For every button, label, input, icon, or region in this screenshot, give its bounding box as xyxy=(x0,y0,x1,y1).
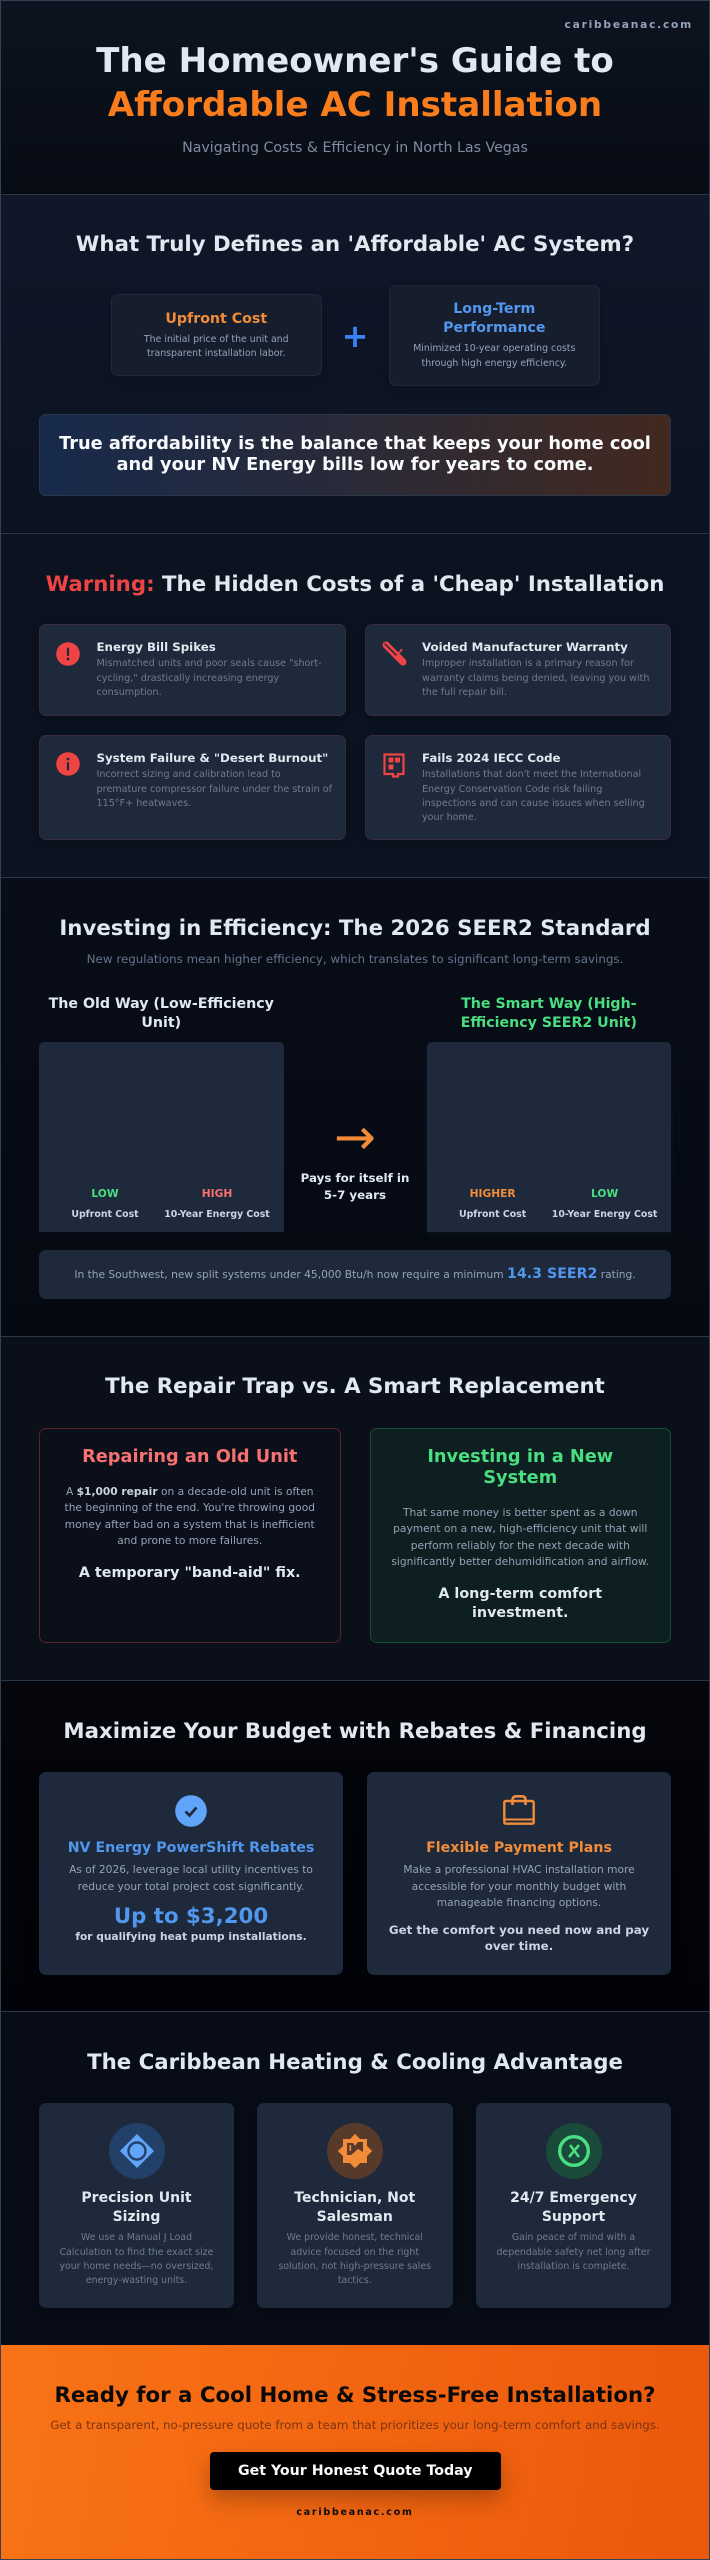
column title: smart way xyxy=(461,996,637,1031)
heading: Warning: The Hidden Costs of a 'Cheap' Installation xyxy=(46,572,664,597)
rebate amount: Up to $3,200 xyxy=(114,1904,268,1929)
card text: accessible for your monthly budget with xyxy=(412,1880,626,1893)
card conclusion: A long-term comfort xyxy=(438,1586,602,1602)
column title: old way: Unit) xyxy=(141,1015,181,1031)
icon: wrench xyxy=(382,642,406,666)
label: low upfront: LOW xyxy=(91,1187,119,1200)
card: long-term performance xyxy=(389,285,600,386)
column title: smart way: The Smart Way (High- xyxy=(461,996,637,1012)
card title xyxy=(294,2190,415,2225)
card text: through high energy efficiency. xyxy=(422,358,567,369)
card title: Precision Unit xyxy=(81,2190,192,2206)
card: precision sizing xyxy=(39,2103,234,2308)
section: repair vs replacement xyxy=(0,1337,710,1681)
card: payment plans xyxy=(367,1772,671,1975)
rebate note: for qualifying heat pump installations. xyxy=(75,1930,307,1943)
card text: tactics. xyxy=(338,2275,372,2286)
card text xyxy=(278,2232,431,2286)
card text: advice focused on the right xyxy=(290,2247,419,2258)
section: company advantage xyxy=(0,2012,710,2345)
card text xyxy=(403,1863,635,1909)
card: repairing xyxy=(39,1428,340,1643)
heading: Investing in Efficiency: The 2026 SEER2 Standard xyxy=(59,916,651,941)
card: emergency support xyxy=(476,2103,671,2308)
card text: Minimized 10-year operating costs xyxy=(413,343,575,354)
SEER2 note xyxy=(39,1250,671,1299)
card title: Energy Bill Spikes xyxy=(96,640,216,654)
plus sign: + xyxy=(342,317,368,355)
icon: info xyxy=(56,752,80,776)
axis: upfront cost: Upfront Cost xyxy=(71,1209,139,1220)
card text xyxy=(69,1863,313,1893)
card text: A $1,000 repair on a decade-old unit is often xyxy=(66,1485,314,1498)
title xyxy=(96,41,614,125)
card text: Incorrect sizing and calibration lead to xyxy=(96,769,281,780)
card text: premature compressor failure under the strain of xyxy=(96,784,332,795)
card text xyxy=(64,1485,315,1547)
card heading: Repairing an Old Unit xyxy=(82,1447,297,1467)
card text: significantly better dehumidification and airflow. xyxy=(391,1555,649,1568)
card text: transparent installation labor. xyxy=(147,348,286,359)
card conclusion xyxy=(438,1586,602,1621)
card text: We provide honest, technical xyxy=(287,2232,423,2243)
card text xyxy=(391,1506,649,1568)
card: fails code xyxy=(365,735,671,840)
payback text: 5-7 years xyxy=(324,1188,386,1202)
card text: dependable safety net long after xyxy=(496,2247,651,2258)
callout text: True affordability is the balance that keeps your home cool xyxy=(59,434,651,454)
card conclusion: over time. xyxy=(485,1939,553,1953)
card text: That same money is better spent as a down xyxy=(403,1506,638,1519)
card text: and prone to more failures. xyxy=(117,1534,262,1547)
card text: Gain peace of mind with a xyxy=(512,2232,635,2243)
label: higher upfront: HIGHER xyxy=(470,1187,516,1200)
heading: What Truly Defines an 'Affordable' AC System? xyxy=(76,232,634,257)
card title: System Failure & "Desert Burnout" xyxy=(96,751,328,765)
card text: Calculation to find the exact size xyxy=(60,2247,213,2258)
card text: warranty claims being denied, leaving you with xyxy=(422,673,650,684)
card text: your home. xyxy=(422,812,477,823)
callout text xyxy=(59,434,651,475)
website label: caribbeanac.com xyxy=(296,2507,414,2518)
card text: We use a Manual J Load xyxy=(81,2232,192,2243)
card: investing xyxy=(370,1428,671,1643)
section: efficiency standard xyxy=(0,878,710,1337)
CTA button xyxy=(210,2452,500,2490)
card heading: Investing in a New xyxy=(427,1447,613,1467)
card text: payment on a new, high-efficiency unit that will xyxy=(393,1522,647,1535)
subtitle: Navigating Costs & Efficiency in North Las Vegas xyxy=(182,140,528,156)
card text: Energy Conservation Code risk failing xyxy=(422,784,602,795)
payback text: Pays for itself in xyxy=(301,1171,409,1185)
section: what defines affordable xyxy=(0,195,710,534)
label: low energy: LOW xyxy=(591,1187,618,1200)
card: system failure xyxy=(39,735,346,840)
card: voided warranty xyxy=(365,624,671,716)
card heading: NV Energy PowerShift Rebates xyxy=(68,1840,314,1856)
card text: installation is complete. xyxy=(518,2261,629,2272)
card text: your home needs—no oversized, xyxy=(60,2261,213,2272)
website label: caribbeanac.com xyxy=(565,18,693,30)
payback text xyxy=(301,1171,409,1202)
axis: energy cost: 10-Year Energy Cost xyxy=(164,1209,270,1220)
card title: Voided Manufacturer Warranty xyxy=(422,640,628,654)
title: The Homeowner's Guide to xyxy=(96,41,614,81)
chart panel: smart way xyxy=(427,1042,671,1232)
column title: old way xyxy=(48,996,274,1031)
card title: Fails 2024 IECC Code xyxy=(422,751,561,765)
axis: energy cost: 10-Year Energy Cost xyxy=(552,1209,657,1220)
CTA heading: Ready for a Cool Home & Stress-Free Installation? xyxy=(54,2382,656,2408)
column title: smart way: Efficiency SEER2 Unit) xyxy=(461,1015,637,1031)
card heading: Performance xyxy=(443,320,546,336)
card heading: Flexible Payment Plans xyxy=(426,1840,612,1856)
card: rebates xyxy=(39,1772,343,1975)
card text: The initial price of the unit and xyxy=(144,334,289,345)
icon: technician star xyxy=(327,2123,383,2179)
card title: Technician, Not xyxy=(294,2190,415,2206)
heading: Maximize Your Budget with Rebates & Financing xyxy=(63,1719,647,1744)
card text: money after bad on a system that is inefficient xyxy=(65,1518,315,1531)
card text xyxy=(96,769,332,809)
card text: inspections and can cause issues when selling xyxy=(422,798,645,809)
card text xyxy=(422,769,645,823)
card text xyxy=(96,658,322,698)
card heading: Long-Term xyxy=(453,301,535,317)
card conclusion xyxy=(389,1923,649,1953)
CTA text: Get a transparent, no-pressure quote from a team that prioritizes your long-term comfort and savings. xyxy=(50,2418,660,2432)
card text: solution, not high-pressure sales xyxy=(278,2261,431,2272)
section: rebates and financing xyxy=(0,1681,710,2012)
section: hidden costs warning xyxy=(0,534,710,878)
card text: Mismatched units and poor seals cause "short- xyxy=(96,658,322,669)
card conclusion: Get the comfort you need now and pay xyxy=(389,1923,649,1937)
axis: upfront cost: Upfront Cost xyxy=(459,1209,526,1220)
card: upfront cost xyxy=(111,294,322,376)
card conclusion: A temporary "band-aid" fix. xyxy=(79,1565,301,1581)
arrow: → xyxy=(334,1108,376,1166)
card text: Installations that don't meet the International xyxy=(422,769,641,780)
card text xyxy=(60,2232,213,2286)
card conclusion: investment. xyxy=(472,1605,568,1621)
card heading xyxy=(443,301,546,336)
card title: Salesman xyxy=(317,2209,393,2225)
icon: check badge xyxy=(175,1795,207,1827)
icon: tools ring xyxy=(546,2123,602,2179)
card text: consumption. xyxy=(96,687,162,698)
card heading xyxy=(427,1447,613,1488)
card text: energy-wasting units. xyxy=(86,2275,187,2286)
card: energy bill spikes xyxy=(39,624,346,716)
card title: Sizing xyxy=(113,2209,160,2225)
card text xyxy=(144,334,289,359)
card text xyxy=(413,343,575,369)
card text: perform reliably for the next decade with xyxy=(411,1539,630,1552)
chart panel: old way xyxy=(39,1042,284,1232)
card text xyxy=(422,658,650,698)
hero header xyxy=(0,0,710,195)
note text: In the Southwest, new split systems under 45,000 Btu/h now require a minimum 14.3 SEER2 rating. xyxy=(74,1266,636,1282)
card text: As of 2026, leverage local utility incentives to xyxy=(69,1863,313,1876)
card text: Improper installation is a primary reason for xyxy=(422,658,634,669)
icon: building xyxy=(383,753,405,778)
card text: cycling," drastically increasing energy xyxy=(96,673,279,684)
card: technician xyxy=(257,2103,452,2308)
icon: briefcase xyxy=(503,1795,535,1825)
payback arrow group xyxy=(301,1108,409,1202)
card title xyxy=(81,2190,192,2225)
card title xyxy=(510,2190,637,2225)
CTA button: Get Your Honest Quote Today xyxy=(238,2463,473,2479)
icon: exclamation xyxy=(56,642,80,666)
call to action xyxy=(0,2345,710,2560)
title: Affordable AC Installation xyxy=(108,85,602,125)
card title: 24/7 Emergency xyxy=(510,2190,637,2206)
heading: The Repair Trap vs. A Smart Replacement xyxy=(105,1374,605,1399)
section subtitle: New regulations mean higher efficiency, which translates to significant long-term savings. xyxy=(87,952,623,966)
card heading: System xyxy=(483,1468,557,1488)
label: high energy: HIGH xyxy=(202,1187,232,1200)
card text: reduce your total project cost significantly. xyxy=(78,1880,304,1893)
card heading: Upfront Cost xyxy=(165,311,267,327)
card title: Support xyxy=(542,2209,605,2225)
card text: the full repair bill. xyxy=(422,687,507,698)
column title: old way: The Old Way (Low-Efficiency xyxy=(49,996,274,1012)
heading: The Caribbean Heating & Cooling Advantage xyxy=(87,2050,623,2075)
callout xyxy=(39,414,671,496)
card text: manageable financing options. xyxy=(437,1896,601,1909)
card text: the beginning of the end. You're throwing good xyxy=(65,1501,315,1514)
callout text: and your NV Energy bills low for years to come. xyxy=(117,455,593,475)
card text: 115°F+ heatwaves. xyxy=(96,798,191,809)
card text: Make a professional HVAC installation more xyxy=(403,1863,635,1876)
card text xyxy=(496,2232,651,2272)
icon: target diamond xyxy=(109,2123,165,2179)
